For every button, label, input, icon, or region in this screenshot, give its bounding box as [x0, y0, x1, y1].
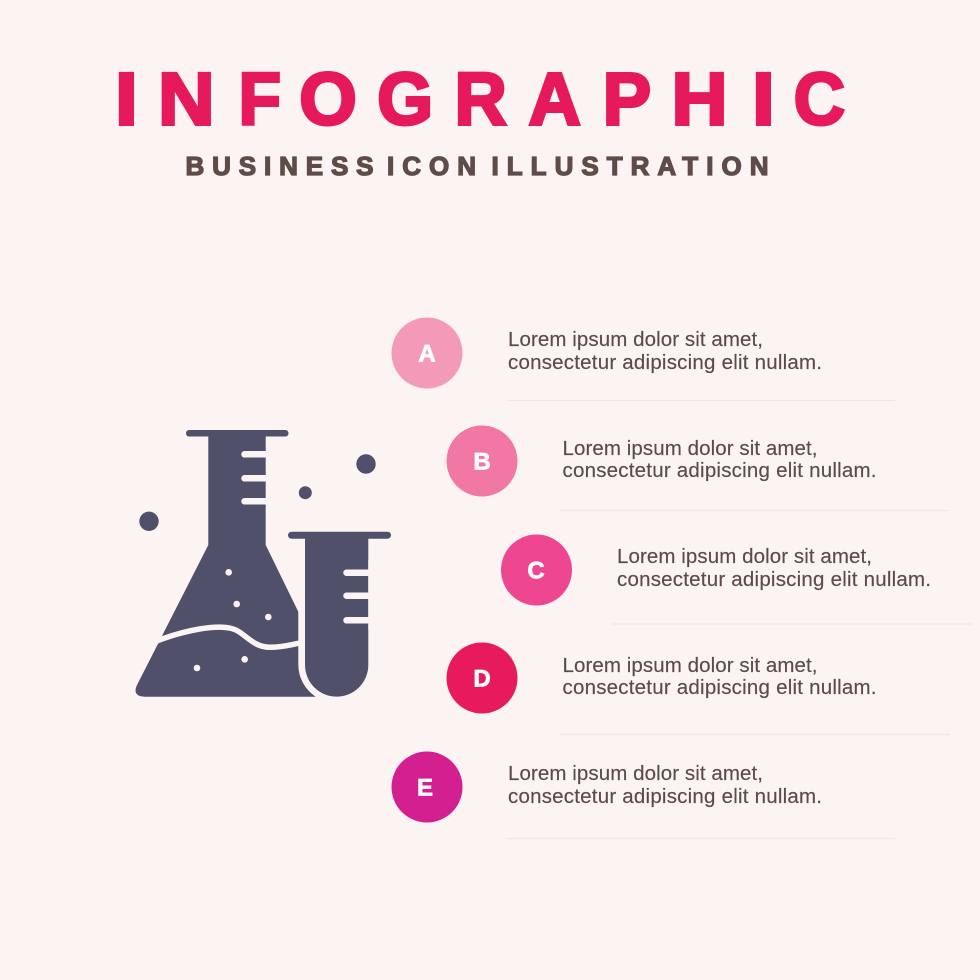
text A: consectetur adipiscing elit nullam. — [508, 351, 822, 374]
title: P — [603, 58, 651, 141]
title: A — [528, 58, 581, 141]
title: H — [672, 58, 728, 141]
step B — [446, 426, 948, 510]
bubbles — [139, 454, 376, 531]
test tube — [288, 532, 391, 697]
text C: consectetur adipiscing elit nullam. — [617, 568, 931, 591]
badge E: E — [417, 774, 433, 802]
badge A: A — [418, 340, 436, 368]
step A — [392, 318, 895, 400]
step D — [446, 642, 950, 734]
badge C: C — [527, 558, 545, 584]
step C — [501, 534, 972, 624]
badge B — [446, 426, 518, 496]
title: N — [158, 59, 215, 141]
icon: flask and test tube — [136, 430, 391, 697]
flask — [136, 430, 316, 697]
text C — [617, 545, 931, 591]
subtitle — [186, 151, 768, 181]
text E: consectetur adipiscing elit nullam. — [508, 785, 822, 808]
text D: consectetur adipiscing elit nullam. — [562, 676, 876, 699]
text B: Lorem ipsum dolor sit amet, — [562, 437, 818, 460]
title: I — [752, 57, 775, 141]
subtitle: BUSINESS — [186, 151, 374, 181]
title: C — [794, 58, 845, 141]
title — [115, 57, 845, 141]
text E — [508, 762, 822, 808]
badge D — [446, 642, 518, 714]
text D: Lorem ipsum dolor sit amet, — [562, 654, 818, 677]
text C: Lorem ipsum dolor sit amet, — [617, 545, 872, 568]
title: I — [115, 57, 138, 141]
text E: Lorem ipsum dolor sit amet, — [508, 762, 763, 785]
title: G — [377, 59, 433, 141]
step E — [392, 752, 895, 838]
badge D: D — [473, 666, 491, 692]
badge E — [392, 752, 462, 822]
text D — [562, 654, 876, 699]
subtitle: ICON — [387, 151, 476, 181]
badge B: B — [473, 448, 491, 476]
subtitle: ILLUSTRATION — [492, 151, 768, 181]
text A: Lorem ipsum dolor sit amet, — [508, 328, 763, 351]
text B: consectetur adipiscing elit nullam. — [562, 459, 876, 482]
badge A — [392, 318, 462, 388]
badge C — [501, 534, 572, 606]
text B — [562, 437, 876, 482]
text A — [508, 328, 822, 374]
title: R — [454, 58, 507, 141]
title: F — [238, 59, 281, 141]
title: O — [299, 58, 357, 140]
